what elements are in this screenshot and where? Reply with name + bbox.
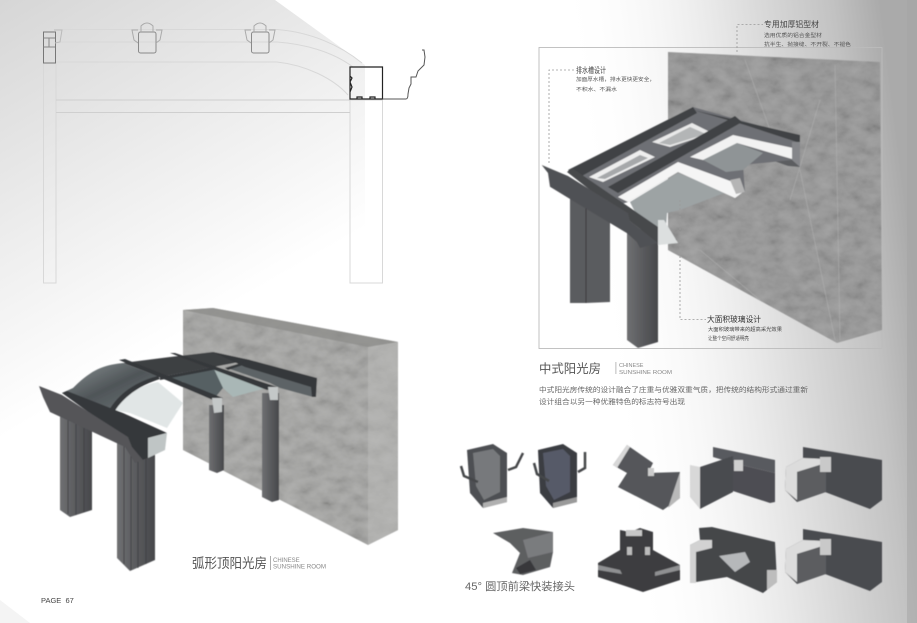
roof frame [568,107,800,240]
leader line [737,24,763,52]
wall bracket [763,150,800,167]
part: gutter connector B [534,444,585,508]
callout: drainage channel: 不积水、不漏水 [576,86,617,93]
part: eave connector [493,528,553,575]
front right post [627,225,658,348]
body: 大面积玻璃带来的超高采光效果 [708,326,782,333]
right panel frame [539,48,882,348]
description text: 中式阳光房传统的设计融合了庄重与优雅双重气质，把传统的结构形式通过重新 [539,385,808,394]
rear posts [209,393,279,502]
arched glass roof [62,352,317,428]
heading: 专用加厚铝型材 [764,19,819,29]
white frame right [690,135,793,160]
front arched beam [62,391,167,462]
rear left post [570,195,610,303]
upper right: Chinese sunshine room [542,52,882,348]
description text: 设计组合以另一种优雅特色的标志符号出现 [539,397,685,406]
white frame front [618,162,743,202]
arched rafter lines [56,30,362,95]
caption: Chinese sunshine room [539,361,672,376]
glass panel right [703,143,763,172]
fascia panel [39,386,143,463]
clip section icon 2 [245,23,275,53]
callout: thick aluminium profile: 抗半生、抛接缝、不开裂、不褪色 [764,41,851,48]
callout: large glass: 让整个空间舒适明亮 [708,335,749,342]
beam box section [350,67,382,99]
description text [539,385,808,406]
front beam [567,168,677,243]
part: 45 degree joint [613,445,680,510]
gutter profile [382,50,425,99]
part: tee D [690,447,775,509]
heading: 排水槽设计 [576,65,606,75]
title: 中式阳光房 [539,361,601,376]
beam cut face [658,220,678,245]
part: cross joint [598,528,680,592]
left post outline [44,63,56,283]
bottom left page corner [0,600,30,623]
white window rear [652,123,712,147]
leader line [549,70,575,163]
caption: arched room [192,556,326,571]
callout: large glass [680,200,782,342]
line drawing: arched roof elevation [44,23,425,283]
rafter end caps [212,387,278,413]
stone wall [183,308,398,545]
title: 弧形顶阳光房 [192,556,267,571]
white window front [589,150,655,182]
right post outline [350,100,382,283]
stone wall [668,52,882,343]
front post [117,440,155,571]
connector parts grid [461,444,882,593]
roof beams [568,107,800,193]
caption: Chinese sunshine room: SUNSHINE ROOM [619,370,672,376]
page number: PAGE 67 [41,596,74,605]
leader line [680,200,706,320]
body: 选用优质的铝合金型材 [764,32,822,39]
parts caption: 45° 圆顶前梁快装接头 [465,579,575,593]
part: gutter connector A [461,444,523,508]
left post [60,405,92,517]
lower left: arched sunshine room [39,308,398,571]
caption: arched room: SUNSHINE ROOM [273,564,326,570]
end clips [730,142,800,194]
glass panel front [630,173,727,240]
english title: CHINESE [619,363,644,369]
body: 加面厚水槽，排水更快更安全， [576,76,655,83]
heading: 大面积玻璃设计 [707,314,761,324]
clip section icon 1 [132,23,162,53]
callout: drainage channel [549,65,655,163]
part: tee E [785,447,882,509]
callout: thick aluminium profile [737,19,851,52]
part: tee I [785,529,882,591]
arched roof rafters [108,352,317,414]
part: tee H [690,527,777,593]
english title: CHINESE [273,558,300,564]
lower beam lines [56,100,350,112]
roof base [568,107,800,205]
fascia panel [542,165,658,248]
left end section [44,30,62,63]
